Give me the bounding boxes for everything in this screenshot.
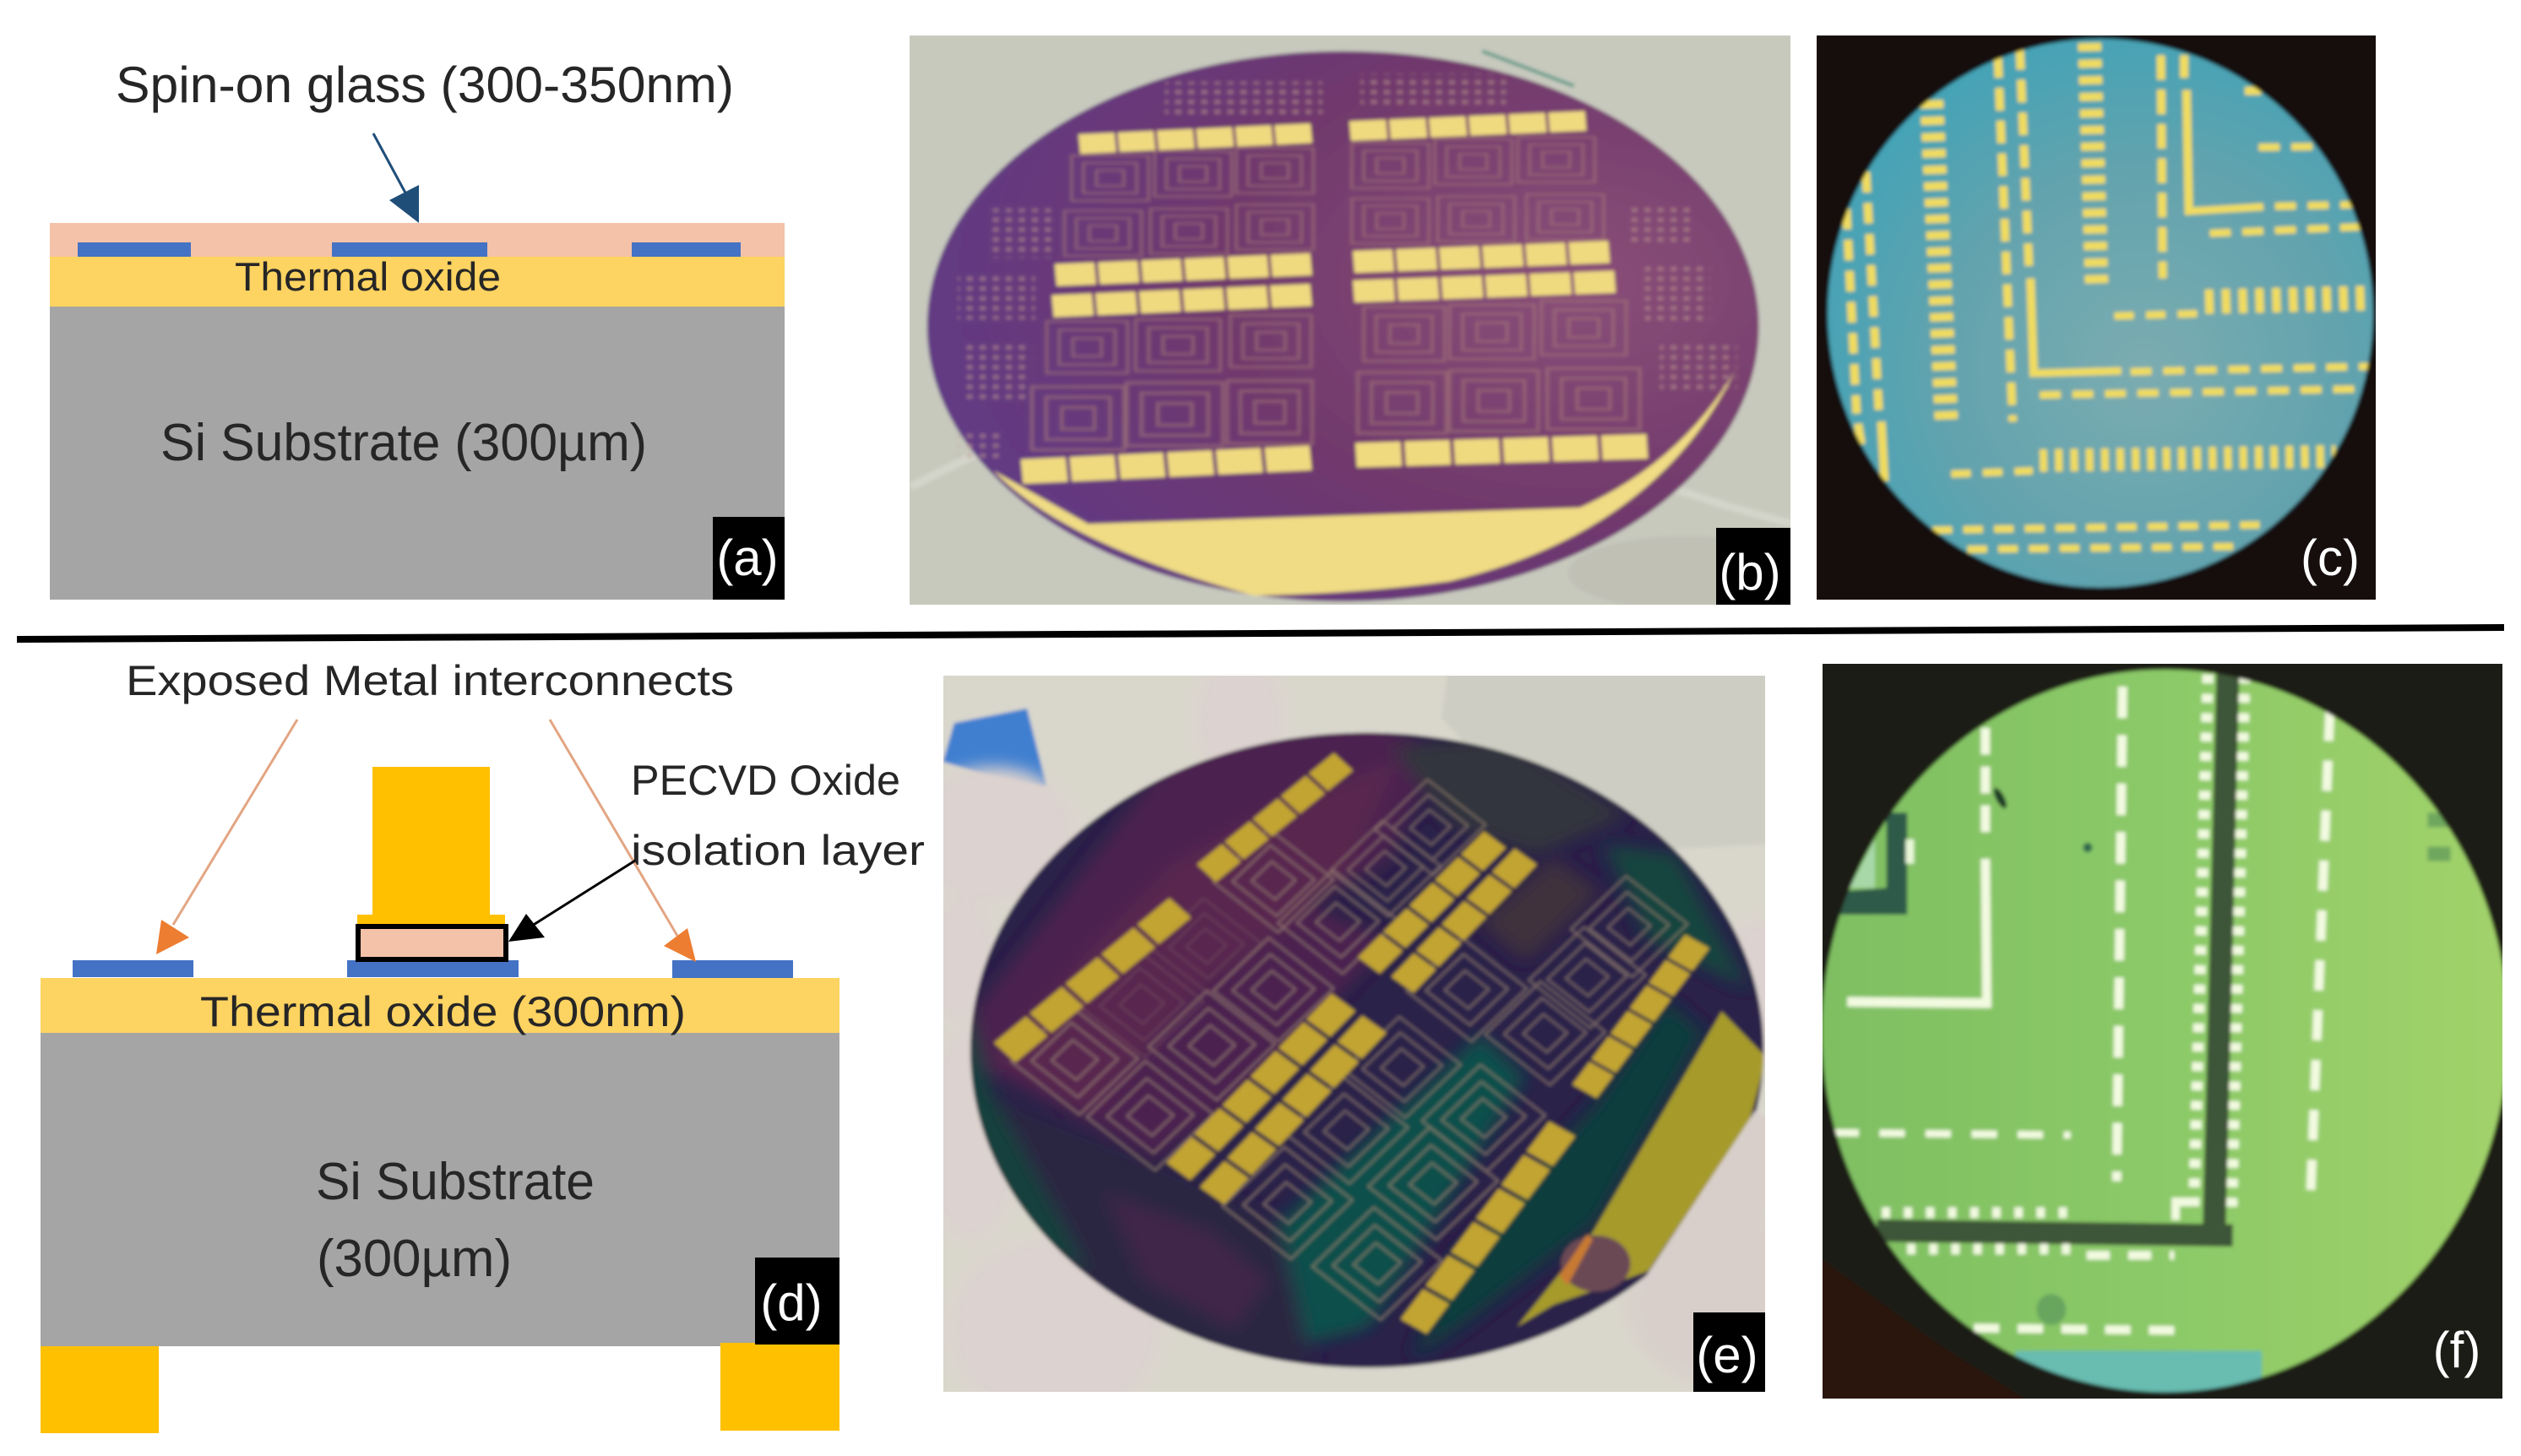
arrow: isolation pointer	[508, 861, 635, 942]
panel a: spin-on glass cross-section	[50, 57, 785, 600]
contact pad rows	[1004, 759, 1699, 1327]
label: exposed metal: Exposed Metal interconnects	[126, 657, 734, 704]
panel d: device cross-section	[41, 657, 925, 1433]
label: silicon substrate	[316, 1153, 595, 1288]
layer: silicon substrate	[50, 307, 785, 600]
label: thermal oxide 300nm: Thermal oxide (300nm)	[200, 988, 686, 1035]
panel tag f: (f)	[2433, 1322, 2480, 1378]
photo background	[905, 33, 1799, 610]
panel c: microscope image	[1814, 33, 2380, 604]
wafer colour regions	[972, 734, 1743, 1353]
wafer disc	[970, 733, 1763, 1368]
lab background	[937, 670, 1772, 1397]
field of view	[1828, 39, 2373, 588]
label: silicon substrate: (300µm)	[317, 1230, 512, 1288]
panel tag d	[755, 1258, 839, 1345]
panel f: microscope image	[1817, 660, 2508, 1402]
layer: thermal oxide	[50, 257, 785, 307]
panel tag e	[1693, 1312, 1765, 1392]
isolation oxide	[358, 926, 506, 959]
dark surround	[1814, 33, 2380, 604]
layer: thermal oxide	[41, 978, 839, 1033]
panel tag b	[1716, 528, 1790, 605]
teal edge strip	[2015, 1350, 2262, 1399]
gold crescent	[993, 371, 1736, 595]
label: PECVD oxide	[631, 757, 925, 874]
panel tag d: (d)	[760, 1274, 823, 1331]
panel e: processed wafer held in gloves	[943, 676, 1765, 1392]
yellow metal pattern	[1846, 43, 2371, 549]
label: thermal oxide: Thermal oxide	[235, 254, 501, 299]
panel tag a	[713, 517, 785, 600]
panel tag c: (c)	[2301, 530, 2360, 586]
metal lines	[78, 242, 741, 257]
top-left corner structure	[1838, 810, 1910, 917]
contact pad rows	[1022, 121, 1651, 471]
panel tag a: (a)	[716, 530, 779, 586]
label: spin-on glass: Spin-on glass (300-350nm)	[116, 57, 734, 113]
field of view	[1822, 670, 2508, 1392]
gold edge bead	[1517, 1012, 1767, 1327]
label: silicon substrate: Si Substrate (300µm)	[160, 414, 647, 472]
layer: spin-on glass	[50, 223, 785, 258]
label: PECVD oxide: isolation layer	[631, 827, 925, 874]
backside pads	[41, 1343, 839, 1433]
metal pillar	[357, 767, 505, 926]
arrow: spin-on glass pointer	[373, 133, 419, 223]
dark metal trace	[1877, 665, 2233, 1236]
arrow: right interconnect	[550, 720, 696, 962]
dark surround	[1817, 660, 2508, 1402]
white pattern	[1834, 675, 2330, 1330]
wafer disc	[927, 52, 1759, 601]
small test arrays	[958, 73, 1737, 459]
wafer flat cut	[1645, 1109, 1758, 1275]
divider line	[17, 624, 2504, 643]
layer: silicon substrate	[41, 1033, 839, 1346]
panel b: wafer photo	[905, 33, 1805, 610]
surface debris	[1991, 779, 2451, 1325]
coil devices	[1011, 780, 1687, 1320]
gloved fingers	[954, 755, 1047, 787]
coil devices	[1032, 137, 1640, 450]
panel tag b: (b)	[1719, 544, 1781, 600]
arrow: left interconnect	[156, 720, 297, 954]
label: PECVD oxide: PECVD Oxide	[631, 757, 900, 804]
panel tag e: (e)	[1696, 1327, 1758, 1383]
label: silicon substrate: Si Substrate	[316, 1153, 595, 1211]
metal lines	[73, 960, 793, 978]
